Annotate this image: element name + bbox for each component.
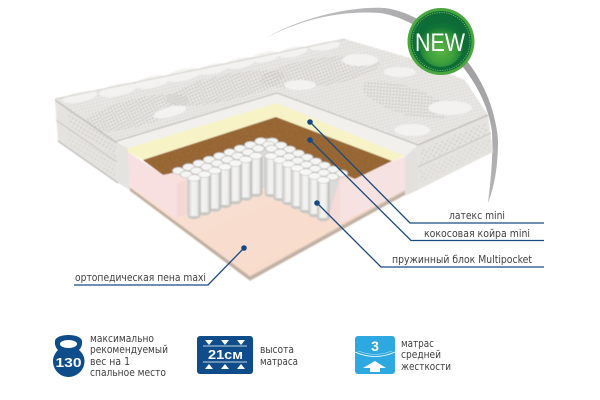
left side panel bbox=[55, 100, 118, 183]
text: medium stiffness bbox=[401, 338, 451, 373]
icon: height 21 cm bbox=[197, 336, 253, 374]
label: foam: ортопедическая пена maxi bbox=[75, 272, 206, 284]
icon: kettlebell 130: 130 bbox=[56, 355, 82, 370]
latex layer bbox=[128, 103, 405, 161]
text: medium stiffness: матрас bbox=[401, 338, 434, 350]
text: medium stiffness: средней bbox=[401, 349, 441, 361]
right pillar bbox=[405, 145, 418, 196]
NEW badge: NEW bbox=[415, 29, 465, 57]
coconut coir layer bbox=[143, 117, 392, 179]
peach foam floor bbox=[128, 150, 405, 276]
icon: stiffness 3 bbox=[355, 336, 395, 374]
label: spring block: пружинный блок Multipocket bbox=[392, 254, 532, 266]
right foam wall bbox=[329, 157, 405, 223]
left foam wall bbox=[128, 152, 187, 218]
text: max weight: спальное место bbox=[90, 367, 166, 379]
leader: latex bbox=[307, 119, 544, 223]
icon: kettlebell 130 bbox=[53, 335, 84, 377]
text: max weight: максимально bbox=[90, 333, 154, 345]
text: max weight: вес на 1 bbox=[90, 356, 130, 368]
leader: coir bbox=[307, 137, 544, 240]
quilted top cover bbox=[55, 39, 488, 146]
mattress illustration bbox=[55, 39, 493, 281]
label: coir: кокосовая койра mini bbox=[424, 228, 530, 240]
base layer edge bbox=[128, 186, 405, 281]
label: latex: латекс mini bbox=[449, 210, 505, 222]
text: medium stiffness: жесткости bbox=[401, 361, 451, 373]
right side panel bbox=[418, 115, 493, 190]
left pillar bbox=[117, 142, 130, 190]
grey arc behind the mattress bbox=[266, 8, 498, 203]
text: mattress height: высота bbox=[260, 344, 294, 356]
leader: foam bbox=[74, 245, 247, 285]
icon: height 21 cm: 21см bbox=[208, 347, 243, 362]
white cover band around the cut bbox=[117, 93, 418, 196]
pocket spring block bbox=[172, 138, 348, 221]
text: mattress height: матраса bbox=[260, 356, 298, 368]
NEW badge bbox=[408, 8, 474, 75]
icon: stiffness 3: 3 bbox=[371, 338, 379, 354]
text: max weight: рекомендуемый bbox=[90, 344, 168, 356]
text: max weight bbox=[90, 333, 168, 379]
leader: spring block bbox=[314, 200, 544, 267]
text: mattress height bbox=[260, 344, 298, 368]
